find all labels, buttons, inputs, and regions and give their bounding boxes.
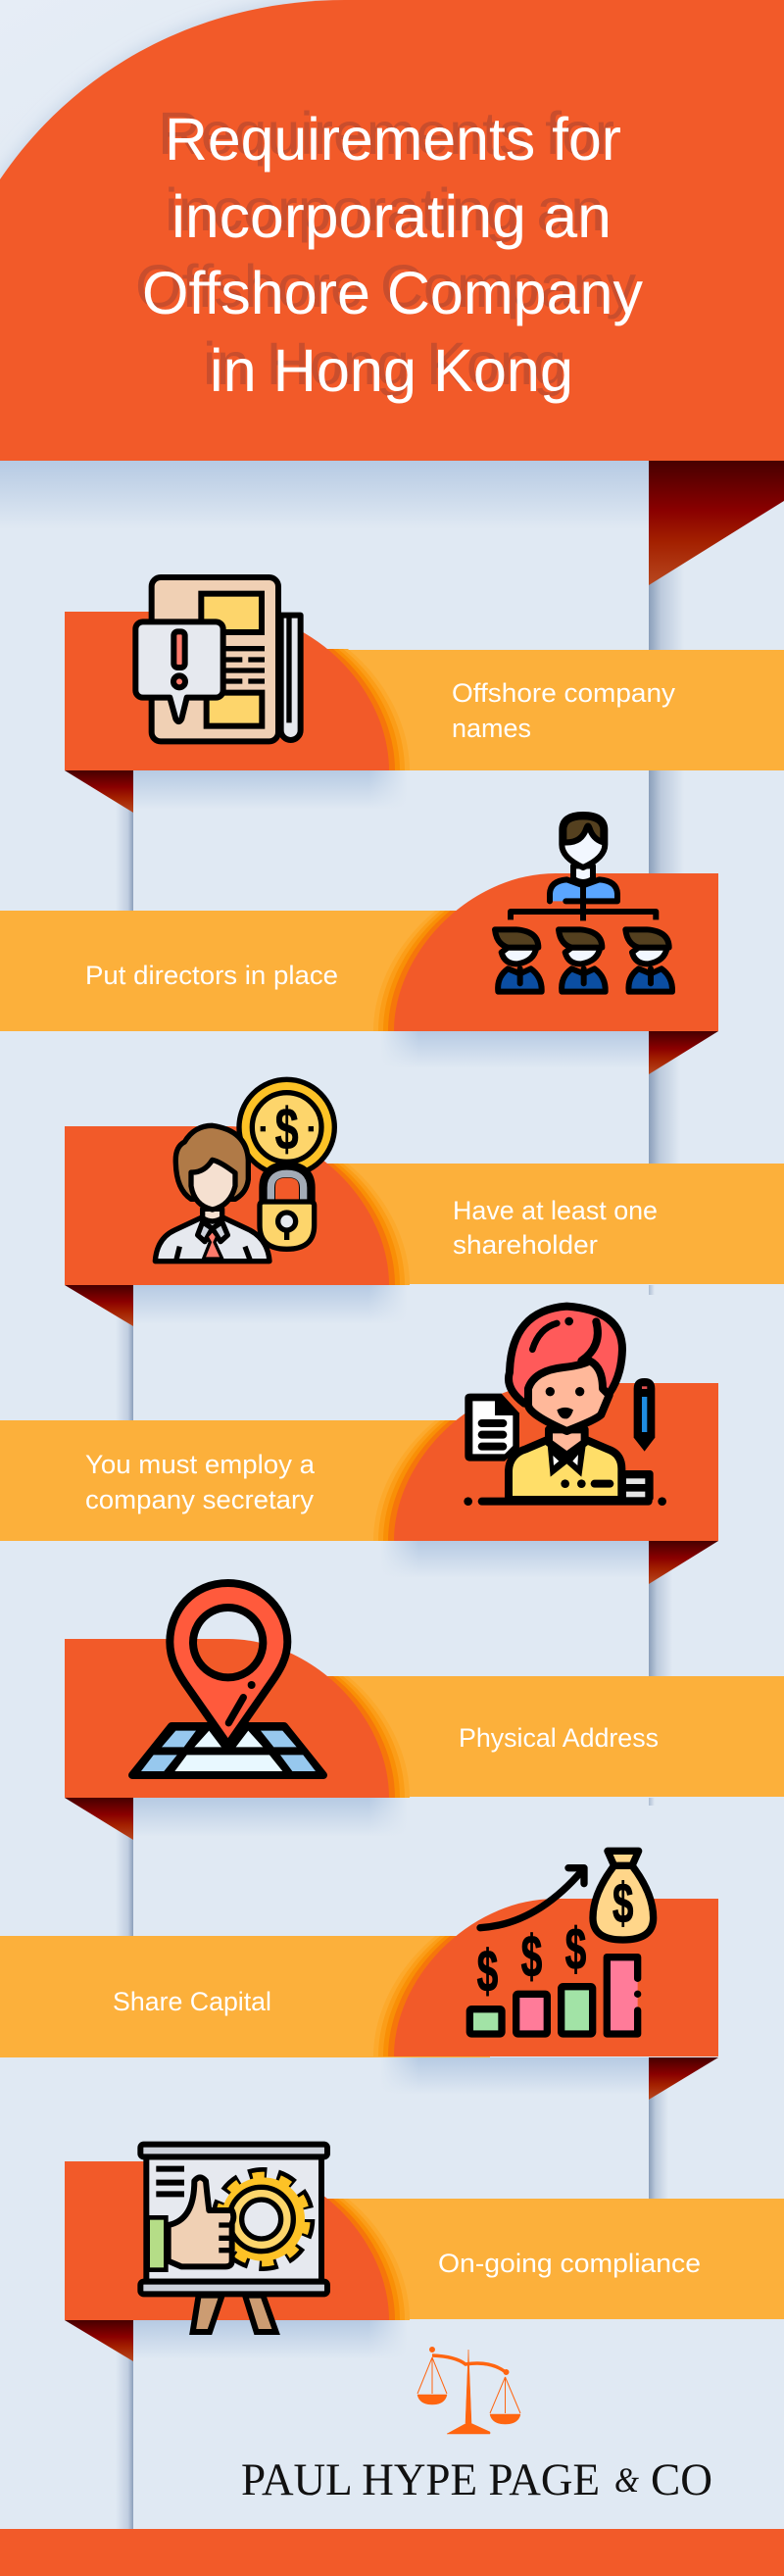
title: Requirements for [158, 100, 614, 167]
panel: have at least one shareholder: Have at least one [453, 1196, 658, 1225]
panel: you must employ a company secretary: You must employ a [85, 1450, 316, 1479]
panel: you must employ a company secretary [0, 1307, 718, 1584]
panel: have at least one shareholder [65, 1079, 784, 1326]
title: in Hong Kong [210, 337, 573, 404]
logo text: CO [651, 2454, 712, 2505]
title: Requirements for [165, 106, 621, 173]
panel: physical address: Physical Address [459, 1723, 659, 1753]
icon: growth chart and money bag [469, 1851, 654, 2034]
header panel [0, 0, 784, 461]
panel: offshore company names: names [452, 714, 531, 743]
icon: newspaper with alert bubble [135, 577, 301, 741]
panel: put directors in place [0, 815, 718, 1074]
panel: you must employ a company secretary: company secretary [85, 1485, 315, 1514]
title: incorporating an [172, 183, 612, 250]
panel: on-going compliance: On-going compliance [438, 2249, 701, 2278]
panel: physical address [65, 1583, 784, 1840]
panel: offshore company names [65, 577, 784, 813]
icon: presentation board with thumbs-up and gear [140, 2145, 327, 2332]
footer bar [0, 2529, 784, 2576]
logo text: & [614, 2460, 639, 2500]
column shadows [116, 544, 684, 2530]
icon: growth chart and money bag: $ [612, 1872, 633, 1935]
title [135, 100, 643, 404]
panel: share capital: Share Capital [113, 1987, 271, 2016]
icon: growth chart and money bag: $ [521, 1923, 542, 1989]
icon: company secretary [464, 1307, 666, 1506]
icon: shareholder with coin and lock: $ [275, 1096, 299, 1162]
logo text: PAUL HYPE PAGE [241, 2454, 600, 2505]
title: in Hong Kong [203, 330, 566, 397]
icon: growth chart and money bag: $ [565, 1916, 586, 1982]
header shadow [0, 461, 649, 529]
panel: put directors in place: Put directors in place [85, 961, 338, 990]
title: Offshore Company [135, 253, 636, 320]
icon: shareholder with coin and lock [155, 1079, 334, 1262]
logo: scales of justice [417, 2347, 520, 2434]
icon: growth chart and money bag: $ [477, 1939, 498, 2005]
icon: director hierarchy [495, 815, 672, 992]
header fold [649, 461, 784, 585]
title: Offshore Company [142, 260, 643, 326]
panel: have at least one shareholder: shareholder [453, 1230, 598, 1260]
panel: on-going compliance [65, 2145, 784, 2361]
panel: offshore company names: Offshore company [452, 678, 676, 708]
panel: share capital [0, 1851, 718, 2100]
icon: map pin [132, 1583, 323, 1775]
title: incorporating an [165, 176, 605, 243]
